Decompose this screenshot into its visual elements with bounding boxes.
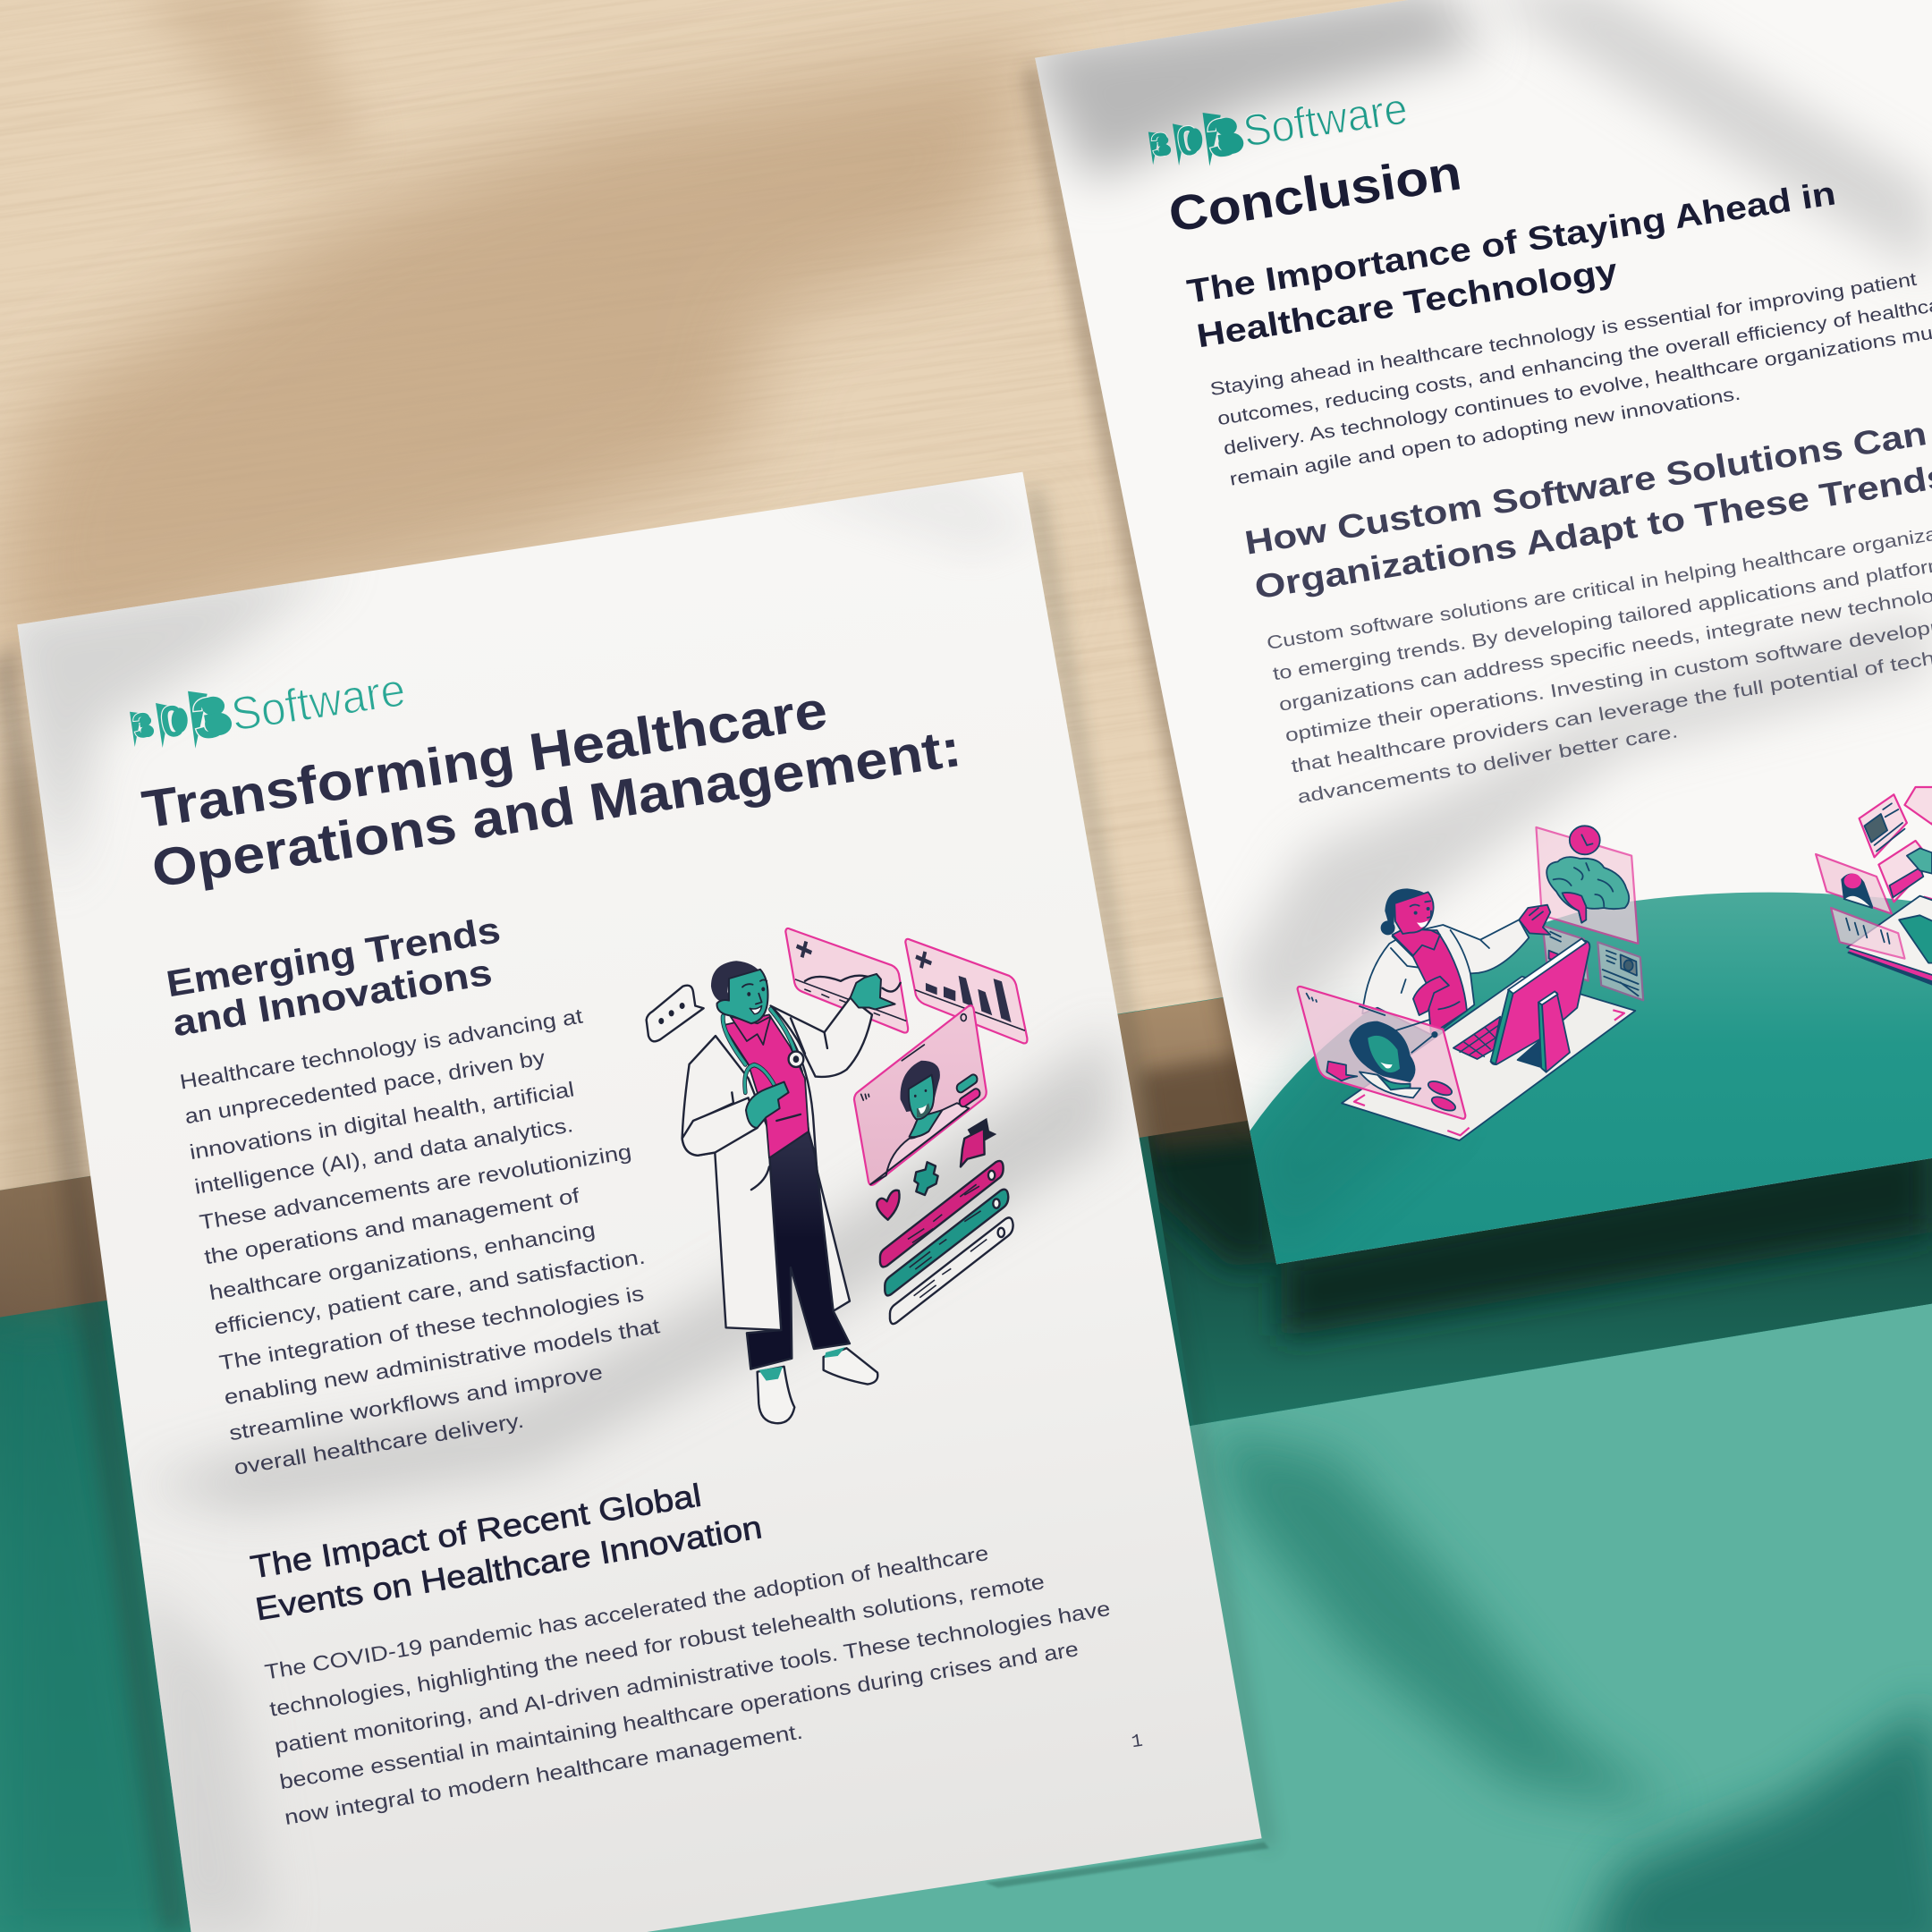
hands	[746, 1082, 789, 1128]
woman doctor	[1362, 888, 1550, 1035]
video panel	[1298, 987, 1465, 1119]
text block: emerging trends: efficiency, patient care, and satisfaction.	[213, 1245, 647, 1339]
keyboard	[1453, 1017, 1500, 1059]
text block: custom software: advancements to deliver better care.	[1296, 721, 1680, 808]
collar	[731, 1016, 771, 1045]
brain panel	[1536, 826, 1643, 1000]
heading: importance of staying ahead: Healthcare Technology	[1194, 250, 1620, 354]
hair	[711, 961, 763, 1001]
logo: 303 Software, page 1	[130, 664, 409, 752]
heading: custom software solutions: How Custom Software Solutions Can	[1242, 414, 1929, 562]
heading: impact of global events	[248, 1478, 765, 1627]
panel: video call	[854, 1005, 987, 1185]
text block: emerging trends: The integration of these technologies is	[217, 1282, 646, 1375]
text block: emerging trends: streamline workflows and improve	[227, 1360, 605, 1445]
doctor figure	[682, 961, 895, 1423]
text block: COVID-19: now integral to modern healthcare management.	[283, 1720, 804, 1829]
raised hand	[851, 974, 895, 1009]
teal curved band	[1250, 893, 1932, 1265]
text block: staying ahead: Staying ahead in healthcare technology is essential for improving patient	[1208, 269, 1919, 400]
shirt	[723, 1014, 809, 1158]
heading: Conclusion: Conclusion	[1165, 144, 1465, 242]
text block: emerging trends: intelligence (AI), and data analytics.	[193, 1113, 575, 1199]
desk mat	[1342, 977, 1635, 1140]
heading: impact of global events: Events on Healthcare Innovation	[253, 1509, 765, 1627]
heading: importance of staying ahead: The Importance of Staying Ahead in	[1184, 174, 1838, 310]
text block: custom software: Custom software solutions are critical in helping healthcare organizations	[1266, 516, 1932, 654]
heading: custom software solutions	[1242, 414, 1932, 606]
text block: COVID-19: technologies, highlighting the need for robust telehealth solutions, remote	[268, 1570, 1046, 1721]
panel: chart line	[785, 928, 908, 1033]
illustration: doctor with floating panels	[647, 928, 1027, 1423]
coat	[682, 1036, 781, 1330]
text block: staying ahead: outcomes, reducing costs, and enhancing the overall efficiency of healthcare	[1216, 292, 1932, 429]
right cluster panels	[1816, 787, 1932, 990]
raised arm	[771, 997, 872, 1077]
text block: emerging trends: These advancements are revolutionizing	[198, 1140, 633, 1234]
logo: 303 Software, page 1: Software	[228, 664, 409, 741]
illustration: doctor at desk with computer	[1298, 787, 1932, 1140]
background: teal surface	[0, 1047, 1932, 1932]
list bar white	[890, 1217, 1013, 1324]
text block: emerging trends: enabling new administrative models that	[223, 1314, 662, 1409]
page 2 paper shading	[1021, 0, 1932, 1047]
logo: 303 Software, page 2: 3	[1203, 106, 1242, 170]
page 1 paper shading	[0, 468, 1115, 1932]
text block: emerging trends: innovations in digital health, artificial	[188, 1077, 576, 1164]
shadow cast by front page	[0, 487, 1274, 1932]
heading: importance of staying ahead	[1184, 174, 1838, 354]
logo: 303 Software, page 1: 3	[130, 705, 156, 747]
list bar teal	[885, 1190, 1008, 1295]
face	[717, 970, 768, 1023]
computer and video panel	[1298, 938, 1589, 1119]
text block: COVID-19: become essential in maintaining healthcare operations during crises and are	[278, 1637, 1080, 1793]
heading: emerging trends: and Innovations	[170, 952, 495, 1044]
lit teal area	[648, 1304, 1932, 1932]
icon: medical cross	[914, 1162, 938, 1195]
shoes	[824, 1348, 877, 1385]
logo: 303 Software, page 1: 3	[188, 683, 231, 752]
wood table	[0, 0, 1932, 1505]
text block: emerging trends: overall healthcare delivery.	[233, 1409, 525, 1479]
brain and data cards	[1546, 857, 1639, 996]
heading: emerging trends	[164, 909, 504, 1044]
icon: chat bubbles	[961, 1118, 996, 1166]
heading: custom software solutions: Organizations Adapt to These Trends	[1252, 456, 1932, 606]
text block: emerging trends	[178, 1004, 662, 1479]
list bar pink	[880, 1161, 1004, 1267]
stethoscope	[723, 1009, 797, 1064]
text block: custom software: to emerging trends. By developing tailored applications and platforms,	[1271, 551, 1932, 684]
heading: impact of global events: The Impact of Recent Global	[248, 1478, 704, 1586]
text block: COVID-19: The COVID-19 pandemic has accelerated the adoption of healthcare	[263, 1541, 990, 1684]
text block: COVID-19	[263, 1541, 1112, 1829]
text block: custom software: organizations can address specific needs, integrate new technologies,	[1277, 578, 1932, 716]
heading: emerging trends: Emerging Trends	[164, 909, 504, 1004]
logo: 303 Software, page 2: Software	[1240, 83, 1411, 157]
text block: COVID-19: patient monitoring, and AI-driven administrative tools. These technologies have	[273, 1597, 1112, 1758]
text block: staying ahead	[1208, 269, 1932, 490]
text block: custom software	[1266, 516, 1932, 808]
title: Transforming Healthcare	[139, 679, 831, 840]
shadow band beneath upper page	[1140, 1047, 1932, 1424]
title: Operations and Management:	[148, 717, 965, 899]
forearm	[682, 1097, 758, 1156]
panel: bar chart	[905, 939, 1027, 1043]
icon: heart	[877, 1191, 900, 1220]
logo: 303 Software, page 2	[1148, 83, 1411, 170]
panel: page 2 conclusion	[1021, 0, 1932, 1355]
logo: 303 Software, page 2: 0	[1174, 115, 1204, 165]
text block: emerging trends: an unprecedented pace, driven by	[183, 1046, 547, 1128]
pants	[747, 1131, 850, 1369]
panel: page 1	[0, 468, 1262, 1932]
text block: staying ahead: remain agile and open to adopting new innovations.	[1228, 384, 1741, 490]
text block: staying ahead: delivery. As technology continues to evolve, healthcare organizations must	[1222, 320, 1932, 459]
monitor	[1491, 941, 1589, 1064]
text block: custom software: that healthcare providers can leverage the full potential of technological	[1290, 632, 1932, 777]
text block: emerging trends: Healthcare technology is advancing at	[178, 1004, 585, 1094]
logo: 303 Software, page 2: 3	[1148, 125, 1173, 165]
page number: 1	[1130, 1732, 1144, 1753]
speech bubble	[647, 986, 704, 1041]
text block: emerging trends: healthcare organizations, enhancing	[208, 1217, 597, 1304]
logo: 303 Software, page 1: 0	[157, 695, 190, 748]
text block: emerging trends: the operations and management of	[203, 1183, 581, 1268]
text block: custom software: optimize their operations. Investing in custom software development,	[1284, 608, 1932, 746]
